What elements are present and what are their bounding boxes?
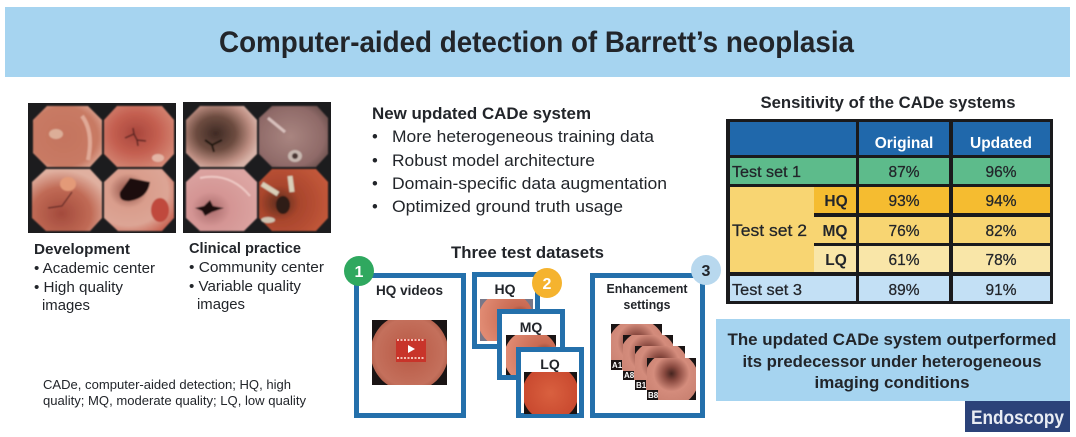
MQ card: MQ [520, 319, 542, 335]
text block: new updated CADe system: • [372, 175, 378, 193]
conclusion callout [716, 319, 1070, 401]
text block: new updated CADe system: • [372, 128, 378, 146]
dataset 3 box [592, 255, 721, 416]
row: test set 3: Test set 3 [732, 282, 802, 299]
row: test set 2: 93% [888, 193, 920, 210]
journal logo: Endoscopy [965, 401, 1070, 432]
text block: new updated CADe system: New updated CADe system [372, 104, 591, 123]
text block: new updated CADe system: More heterogeneous training data [392, 128, 655, 146]
image stack: enhancement settings: A8 [624, 371, 635, 380]
LQ card [518, 350, 582, 421]
icon: number 2 badge [532, 268, 562, 298]
heading: three test datasets: Three test datasets [451, 244, 604, 262]
image stack: enhancement settings: A1 [612, 361, 623, 370]
row: test set 1: 87% [888, 164, 920, 181]
sensitivity table [726, 119, 1053, 304]
row: test set 2: 82% [985, 223, 1017, 240]
icon: number 3 badge: 3 [702, 263, 711, 280]
icon: number 1 badge [344, 256, 374, 286]
row: test set 3: 91% [985, 282, 1017, 299]
row: test set 1: Test set 1 [732, 164, 801, 181]
text block: clinical practice: images [197, 297, 245, 313]
row: test set 2: 78% [985, 252, 1017, 269]
icon: number 2 badge: 2 [543, 276, 552, 293]
abbreviations footnote: CADe, computer-aided detection; HQ, high [43, 378, 291, 392]
title: Computer-aided detection of Barrett’s neoplasia [219, 26, 854, 59]
icon: number 1 badge: 1 [355, 264, 364, 281]
icon: number 3 badge [691, 255, 721, 285]
row: test set 3 [730, 276, 1050, 301]
text block: development [34, 242, 155, 314]
text block: new updated CADe system: Optimized ground truth usage [392, 198, 623, 216]
table header row [730, 122, 1050, 155]
LQ card: LQ [540, 356, 560, 372]
text block: development: Development [34, 242, 130, 258]
text block: new updated CADe system [372, 104, 667, 216]
text block: new updated CADe system: Domain-specific data augmentation [392, 175, 667, 193]
image stack: enhancement settings: B8 [648, 391, 659, 400]
text block: clinical practice: Clinical practice [189, 241, 301, 257]
journal logo: Endoscopy: Endoscopy [971, 408, 1064, 429]
row: test set 2: LQ [825, 252, 847, 269]
image panel: development endoscopy images [28, 103, 176, 233]
text block: development: • High quality [34, 280, 124, 296]
image panel: clinical practice endoscopy images [183, 102, 331, 233]
text block: new updated CADe system: • [372, 198, 378, 216]
abbreviations footnote [43, 378, 307, 408]
row: test set 2: Test set 2 [732, 222, 807, 240]
dataset 1 box: HQ videos [376, 283, 443, 298]
row: test set 3: 89% [888, 282, 920, 299]
text block: clinical practice: • Variable quality [189, 279, 302, 295]
abbreviations footnote: quality; MQ, moderate quality; LQ, low quality [43, 394, 307, 408]
conclusion callout: The updated CADe system outperformed [728, 331, 1056, 349]
dataset 3 box: Enhancement [606, 282, 688, 296]
HQ card: HQ [494, 281, 516, 297]
row: test set 2: 76% [888, 223, 920, 240]
text block: clinical practice: • Community center [189, 260, 324, 276]
conclusion callout: its predecessor under heterogeneous [742, 353, 1042, 371]
text block: development: images [42, 298, 90, 314]
text block: new updated CADe system: • [372, 152, 378, 170]
conclusion callout: imaging conditions [814, 374, 970, 392]
text block: clinical practice [189, 241, 324, 313]
MQ card [500, 312, 562, 384]
dataset 3 box: settings [624, 298, 671, 312]
table header row: Updated [970, 135, 1032, 152]
row: test set 1: 96% [985, 164, 1017, 181]
row: test set 2: 94% [985, 193, 1017, 210]
dataset 2 boxes [474, 268, 582, 421]
table header row: Original [875, 135, 933, 152]
image stack: enhancement settings: B1 [636, 381, 647, 390]
row: test set 2: HQ [824, 193, 848, 210]
text block: development: • Academic center [34, 261, 155, 277]
row: test set 2 [730, 187, 1050, 272]
row: test set 2: 61% [888, 252, 920, 269]
image stack: enhancement settings [611, 324, 696, 400]
row: test set 1 [730, 158, 1050, 184]
image: video frame with play icon [372, 320, 447, 385]
dataset 1 box [344, 256, 464, 416]
row: test set 2: MQ [823, 223, 847, 240]
text block: new updated CADe system: Robust model architecture [392, 152, 595, 170]
heading: sensitivity table: Sensitivity of the CADe systems [760, 94, 1016, 112]
HQ card [474, 274, 538, 348]
title banner [5, 7, 1070, 77]
